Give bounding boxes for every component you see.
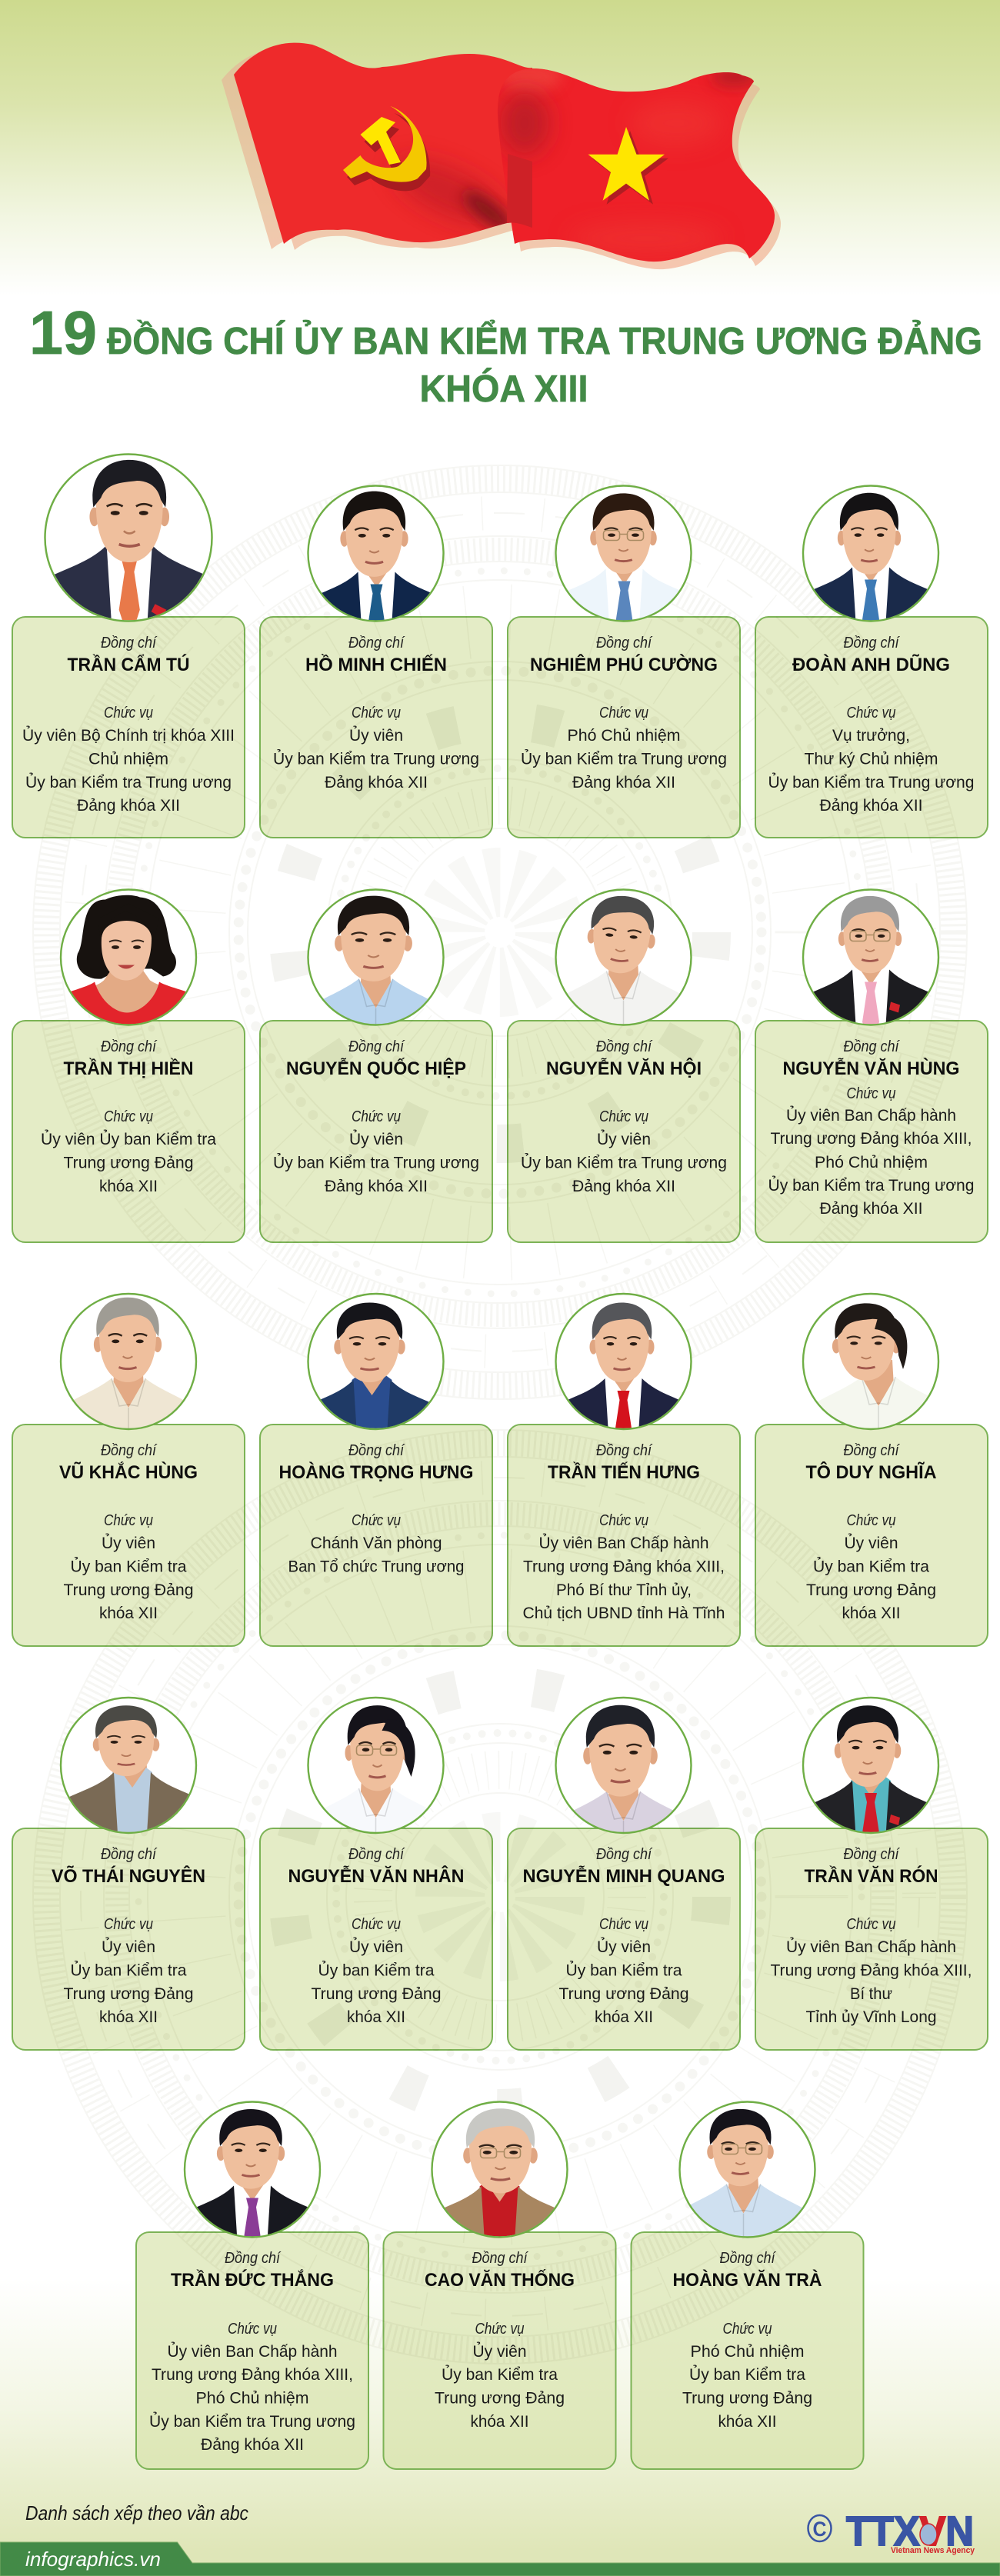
watermark: bronze drum patterns [33, 465, 967, 2364]
card: Đoàn Anh Dũng: Chức vụ [846, 705, 895, 721]
photo: Đoàn Anh Dũng [802, 485, 940, 622]
card: Nguyễn Văn Nhân: Ủy ban Kiểm tra [318, 1961, 435, 1980]
card: Trần Thị Hiền: Chức vụ [104, 1108, 153, 1125]
card: Trần Thị Hiền: TRẦN THỊ HIỀN [63, 1058, 194, 1079]
card: Võ Thái Nguyên: Ủy ban Kiểm tra [71, 1961, 187, 1980]
card: Trần Tiến Hưng: Ủy viên Ban Chấp hành [538, 1534, 709, 1552]
card: Đoàn Anh Dũng: Đồng chí [843, 635, 901, 651]
photo: Vũ Khắc Hùng [52, 1294, 205, 1477]
party flag lower corner over national flag [507, 154, 532, 228]
card: Hồ Minh Chiến: Đảng khóa XII [325, 774, 428, 791]
card: Trần Cẩm Tú: Chức vụ [104, 705, 153, 721]
card: Hoàng Trọng Hưng [260, 1425, 492, 1646]
card: Nguyễn Văn Nhân: Ủy viên [349, 1938, 403, 1956]
photo: Trần Tiến Hưng [546, 1294, 700, 1477]
card: Trần Cẩm Tú: TRẦN CẨM TÚ [68, 654, 189, 675]
card: Đoàn Anh Dũng: ĐOÀN ANH DŨNG [792, 654, 950, 675]
national flag fold shading [500, 62, 758, 255]
card: Trần Thị Hiền: Ủy viên Ủy ban Kiểm tra [41, 1130, 216, 1148]
card: Tô Duy Nghĩa: Ủy viên [845, 1534, 898, 1552]
card: Hoàng Văn Trà: Phó Chủ nhiệm [691, 2343, 805, 2361]
card: Nguyễn Văn Hội: Ủy ban Kiểm tra Trung ương [521, 1154, 727, 1172]
card: Nguyễn Văn Nhân: khóa XII [347, 2008, 405, 2026]
card: Trần Tiến Hưng: Chủ tịch UBND tỉnh Hà Tĩnh [523, 1605, 725, 1622]
card: Vũ Khắc Hùng: Ủy ban Kiểm tra [71, 1557, 187, 1575]
photo: Nguyễn Quốc Hiệp [298, 889, 452, 1077]
card: Nguyễn Văn Nhân: Trung ương Đảng [311, 1985, 442, 2003]
card: Tô Duy Nghĩa: Trung ương Đảng [806, 1581, 936, 1599]
card: Nghiêm Phú Cường: Đồng chí [596, 635, 653, 651]
photo: Nguyễn Văn Hùng [794, 889, 948, 1068]
card: Vũ Khắc Hùng: Trung ương Đảng [63, 1581, 194, 1599]
card: Nguyễn Quốc Hiệp: NGUYỄN QUỐC HIỆP [286, 1057, 466, 1079]
card: Hồ Minh Chiến: Ủy ban Kiểm tra Trung ương [273, 749, 479, 768]
card: Trần Tiến Hưng: Trung ương Đảng khóa XIII, [523, 1558, 725, 1575]
card: Nguyễn Văn Hội: Chức vụ [599, 1108, 648, 1125]
card: Trần Đức Thắng: Đồng chí [225, 2250, 282, 2267]
card: Trần Tiến Hưng: Đồng chí [596, 1442, 653, 1459]
card: Nguyễn Văn Hùng: Trung ương Đảng khóa XIII, [771, 1130, 972, 1148]
card: Hoàng Văn Trà: HOÀNG VĂN TRÀ [672, 2269, 822, 2291]
card: Trần Thị Hiền: Trung ương Đảng [63, 1154, 194, 1172]
card: Võ Thái Nguyên: VÕ THÁI NGUYÊN [52, 1865, 205, 1887]
card: Hoàng Văn Trà: khóa XII [718, 2413, 777, 2431]
photo: Hồ Minh Chiến [307, 485, 445, 622]
card: Nguyễn Văn Hội: Đảng khóa XII [572, 1178, 675, 1195]
photo: Nguyễn Văn Nhân [298, 1698, 452, 1887]
photo: Trần Thị Hiền [59, 889, 198, 1026]
card: Trần Đức Thắng: TRẦN ĐỨC THẮNG [171, 2269, 334, 2291]
card: Hoàng Trọng Hưng: Chánh Văn phòng [311, 1535, 442, 1552]
card: Nguyễn Văn Hùng: Phó Chủ nhiệm [815, 1154, 928, 1171]
card: Trần Cẩm Tú [12, 617, 245, 838]
photo: Hoàng Trọng Hưng [295, 1294, 449, 1478]
card: Nguyễn Văn Hùng: Đảng khóa XII [820, 1200, 923, 1218]
photo: Tô Duy Nghĩa [802, 1294, 955, 1475]
card: Võ Thái Nguyên: Trung ương Đảng [63, 1985, 194, 2003]
card: Hồ Minh Chiến [260, 617, 492, 838]
card: Võ Thái Nguyên: Đồng chí [101, 1846, 158, 1863]
card: Hoàng Văn Trà: Ủy ban Kiểm tra [689, 2365, 805, 2384]
card: Hoàng Văn Trà: Đồng chí [720, 2250, 777, 2267]
card: Đoàn Anh Dũng: Thư ký Chủ nhiệm [805, 751, 938, 768]
card: Nguyễn Văn Hùng: Ủy viên Ban Chấp hành [786, 1106, 956, 1125]
card: Võ Thái Nguyên: Chức vụ [104, 1916, 153, 1933]
card: Trần Tiến Hưng: Chức vụ [599, 1512, 648, 1529]
card: Nguyễn Minh Quang: Ủy viên [597, 1938, 651, 1956]
card: Võ Thái Nguyên: khóa XII [99, 2008, 158, 2026]
card: Nghiêm Phú Cường [508, 617, 740, 838]
footer banner: infographics.vn [25, 2548, 161, 2571]
card: Trần Văn Rón: Đồng chí [843, 1846, 901, 1863]
card: Nguyễn Quốc Hiệp [260, 1021, 492, 1242]
card: Vũ Khắc Hùng: Ủy viên [102, 1534, 155, 1552]
card: Đoàn Anh Dũng: Đảng khóa XII [820, 797, 923, 815]
card: Nghiêm Phú Cường: Chức vụ [599, 705, 648, 721]
icon: hammer and sickle [343, 106, 430, 191]
card: Trần Tiến Hưng: Phó Bí thư Tỉnh ủy, [556, 1581, 692, 1599]
card: Trần Cẩm Tú: Ủy ban Kiểm tra Trung ương [25, 773, 232, 791]
footer banner [0, 2542, 1000, 2576]
card: Cao Văn Thống: khóa XII [471, 2413, 529, 2431]
card: Trần Đức Thắng: Ủy ban Kiểm tra Trung ương [149, 2412, 355, 2431]
card: Tô Duy Nghĩa: TÔ DUY NGHĨA [806, 1461, 937, 1483]
card: Trần Thị Hiền: khóa XII [99, 1178, 158, 1195]
card: Hồ Minh Chiến: Ủy viên [349, 726, 403, 745]
card: Hồ Minh Chiến: HỒ MINH CHIẾN [305, 654, 447, 675]
card: Tô Duy Nghĩa: Đồng chí [843, 1442, 901, 1459]
logo: TTXVN: C [812, 2518, 826, 2541]
card: Nguyễn Văn Hội: Đồng chí [596, 1038, 653, 1055]
icon: yellow star [588, 127, 668, 205]
card: Hồ Minh Chiến: Đồng chí [348, 635, 405, 651]
card: Nguyễn Văn Nhân: Chức vụ [352, 1916, 401, 1933]
card: Đoàn Anh Dũng: Ủy ban Kiểm tra Trung ương [768, 773, 974, 791]
card: Hoàng Văn Trà [631, 2232, 863, 2469]
card: Nguyễn Văn Hùng [755, 1021, 988, 1242]
photo: Nguyễn Văn Hội [546, 889, 700, 1069]
party flag [234, 43, 532, 244]
title: 19 [29, 298, 97, 367]
card: Nguyễn Quốc Hiệp: Ủy ban Kiểm tra Trung ương [273, 1154, 479, 1172]
card: Vũ Khắc Hùng: Chức vụ [104, 1512, 153, 1529]
card: Vũ Khắc Hùng: Đồng chí [101, 1442, 158, 1459]
card: Trần Văn Rón: TRẦN VĂN RÓN [805, 1865, 938, 1887]
national flag [498, 68, 775, 262]
title [29, 298, 982, 410]
card: Tô Duy Nghĩa: Ủy ban Kiểm tra [813, 1557, 929, 1575]
card: Cao Văn Thống: Trung ương Đảng [435, 2389, 565, 2408]
card: Trần Văn Rón: Tỉnh ủy Vĩnh Long [806, 2008, 937, 2026]
card: Nguyễn Văn Hội [508, 1021, 740, 1242]
card: Vũ Khắc Hùng [12, 1425, 245, 1646]
card: Hoàng Văn Trà: Trung ương Đảng [682, 2389, 812, 2408]
card: Trần Văn Rón: Chức vụ [846, 1916, 895, 1933]
photo: Nguyễn Minh Quang [546, 1698, 700, 1890]
card: Nghiêm Phú Cường: Phó Chủ nhiệm [568, 727, 680, 745]
card: Đoàn Anh Dũng: Vụ trưởng, [832, 727, 910, 745]
flag shadows [222, 48, 781, 269]
card: Hoàng Trọng Hưng: Ban Tổ chức Trung ương [288, 1558, 465, 1575]
card: Trần Văn Rón: Ủy viên Ban Chấp hành [786, 1938, 956, 1956]
card: Trần Tiến Hưng: TRẦN TIẾN HƯNG [548, 1461, 700, 1483]
card: Hoàng Trọng Hưng: HOÀNG TRỌNG HƯNG [278, 1461, 474, 1483]
title: KHÓA XIII [420, 368, 588, 410]
card: Nguyễn Văn Hùng: Ủy ban Kiểm tra Trung ương [768, 1176, 974, 1195]
card: Nguyễn Văn Hội: Ủy viên [597, 1130, 651, 1148]
card: Trần Đức Thắng [136, 2232, 368, 2469]
card: Tô Duy Nghĩa: khóa XII [842, 1605, 900, 1622]
card: Hoàng Văn Trà: Chức vụ [723, 2321, 772, 2338]
card: Cao Văn Thống: Ủy viên [472, 2342, 526, 2361]
card: Nguyễn Quốc Hiệp: Chức vụ [352, 1108, 401, 1125]
card: Cao Văn Thống: Đồng chí [472, 2250, 529, 2267]
card: Trần Đức Thắng: Ủy viên Ban Chấp hành [168, 2342, 337, 2361]
card: Trần Cẩm Tú: Đồng chí [101, 635, 158, 651]
card: Trần Cẩm Tú: Đảng khóa XII [77, 797, 180, 815]
card: Nguyễn Quốc Hiệp: Ủy viên [349, 1130, 403, 1148]
photo: Nghiêm Phú Cường [555, 485, 692, 622]
card: Trần Văn Rón: Trung ương Đảng khóa XIII, [771, 1961, 972, 1980]
card: Trần Cẩm Tú: Ủy viên Bộ Chính trị khóa XIII [22, 726, 235, 745]
card: Hồ Minh Chiến: Chức vụ [352, 705, 401, 721]
card: Trần Văn Rón: Bí thư [850, 1985, 892, 2003]
card: Vũ Khắc Hùng: khóa XII [99, 1605, 158, 1622]
photo: Võ Thái Nguyên [55, 1698, 209, 1871]
card: Võ Thái Nguyên: Ủy viên [102, 1938, 155, 1956]
card: Nguyễn Văn Hùng: NGUYỄN VĂN HÙNG [783, 1057, 960, 1079]
flag illustration [222, 43, 781, 269]
photo: Trần Văn Rón [794, 1698, 948, 1879]
logo: TTXVN: Vietnam News Agency [891, 2546, 975, 2555]
card: Nguyễn Minh Quang: Ủy ban Kiểm tra [566, 1961, 682, 1980]
card: Nguyễn Văn Nhân: Đồng chí [348, 1846, 405, 1863]
card: Nguyễn Văn Nhân [260, 1828, 492, 2050]
card: Trần Thị Hiền [12, 1021, 245, 1242]
card: Nghiêm Phú Cường: Ủy ban Kiểm tra Trung ương [521, 749, 727, 768]
card: Trần Tiến Hưng [508, 1425, 740, 1646]
card: Trần Đức Thắng: Trung ương Đảng khóa XIII, [152, 2366, 353, 2384]
card: Nguyễn Quốc Hiệp: Đảng khóa XII [325, 1178, 428, 1195]
card: Trần Văn Rón [755, 1828, 988, 2050]
card: Nguyễn Minh Quang: khóa XII [595, 2008, 653, 2026]
card: Cao Văn Thống: Chức vụ [475, 2321, 525, 2338]
card: Hoàng Trọng Hưng: Chức vụ [352, 1512, 401, 1529]
card: Nguyễn Văn Nhân: NGUYỄN VĂN NHÂN [288, 1865, 465, 1887]
card: Nguyễn Văn Hùng: Chức vụ [846, 1085, 895, 1102]
card: Cao Văn Thống: CAO VĂN THỐNG [425, 2269, 575, 2291]
card: Nguyễn Minh Quang [508, 1828, 740, 2050]
card: Trần Thị Hiền: Đồng chí [101, 1038, 158, 1055]
card: Nghiêm Phú Cường: Đảng khóa XII [572, 774, 675, 791]
logo: TTXVN: TTXVN [846, 2508, 974, 2554]
party flag fold shading [398, 154, 511, 232]
card: Trần Đức Thắng: Chức vụ [228, 2321, 277, 2338]
card: Nguyễn Văn Hùng: Đồng chí [843, 1038, 901, 1055]
footnote: Danh sách xếp theo vần abc [25, 2501, 248, 2524]
card: Hoàng Trọng Hưng: Đồng chí [348, 1442, 405, 1459]
photo: Hoàng Văn Trà [666, 2101, 820, 2283]
card: Tô Duy Nghĩa [755, 1425, 988, 1646]
card: Trần Đức Thắng: Phó Chủ nhiệm [195, 2389, 309, 2408]
card: Nguyễn Minh Quang: Đồng chí [596, 1846, 653, 1863]
card: Nguyễn Minh Quang: NGUYỄN MINH QUANG [523, 1865, 725, 1887]
photo: Trần Đức Thắng [175, 2101, 329, 2284]
card: Đoàn Anh Dũng [755, 617, 988, 838]
card: Nghiêm Phú Cường: NGHIÊM PHÚ CƯỜNG [530, 654, 718, 675]
card: Nguyễn Minh Quang: Trung ương Đảng [558, 1985, 689, 2003]
photo: Trần Cẩm Tú [44, 453, 213, 622]
card: Cao Văn Thống [383, 2232, 615, 2469]
card: Trần Cẩm Tú: Chủ nhiệm [88, 751, 168, 768]
card: Cao Văn Thống: Ủy ban Kiểm tra [442, 2365, 558, 2384]
card: Võ Thái Nguyên [12, 1828, 245, 2050]
photo: Cao Văn Thống [423, 2101, 577, 2284]
card: Trần Đức Thắng: Đảng khóa XII [201, 2436, 304, 2454]
card: Nguyễn Văn Hội: NGUYỄN VĂN HỘI [546, 1057, 702, 1079]
card: Tô Duy Nghĩa: Chức vụ [846, 1512, 895, 1529]
card: Nguyễn Minh Quang: Chức vụ [599, 1916, 648, 1933]
card: Vũ Khắc Hùng: VŨ KHẮC HÙNG [59, 1461, 198, 1483]
card: Nguyễn Quốc Hiệp: Đồng chí [348, 1038, 405, 1055]
